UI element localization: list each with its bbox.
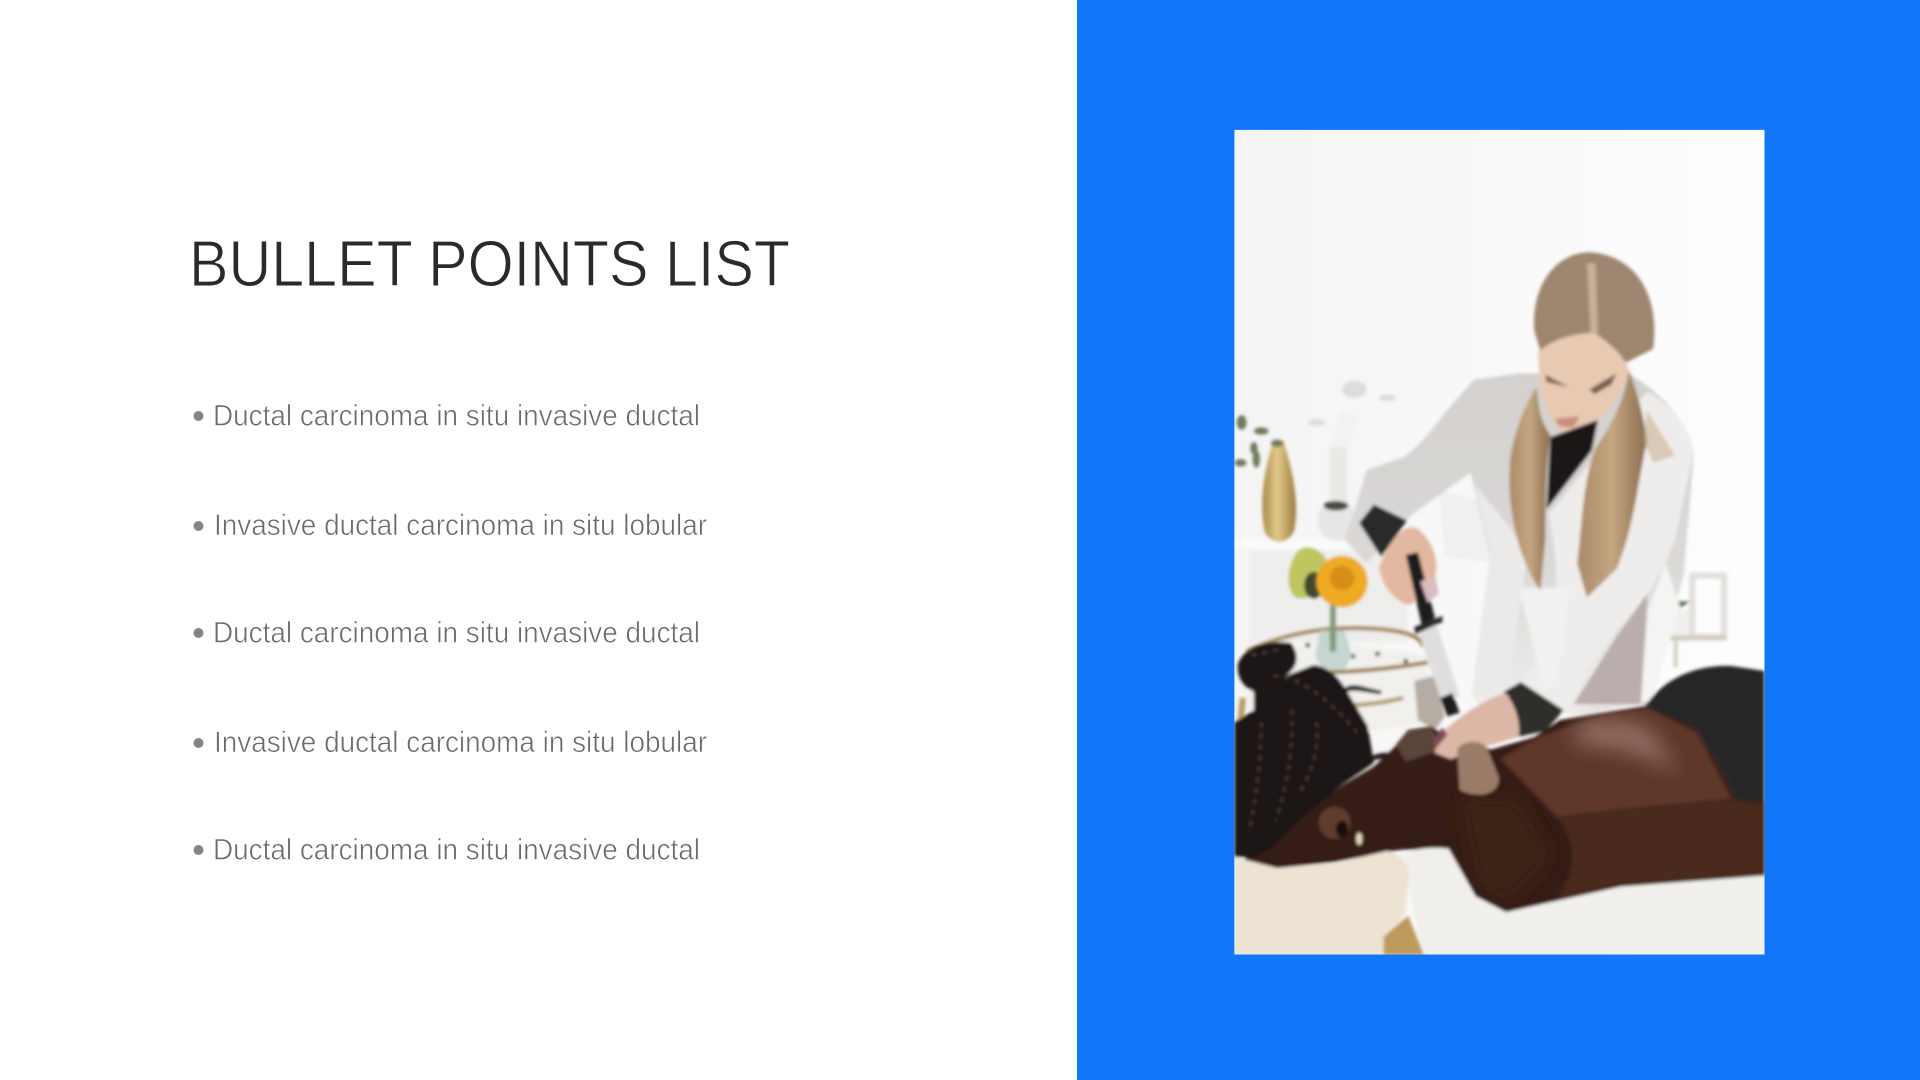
therapist right hand and cuff (1433, 682, 1564, 759)
therapist left hand and cuff (1359, 504, 1436, 605)
photo: therapist performing cupping on a patient (1234, 130, 1764, 955)
bullet item 3: Ductal carcinoma in situ invasive ductal (213, 616, 700, 650)
patient body (1244, 705, 1764, 912)
glass cups on the table (1414, 676, 1445, 730)
wooden table leg (1384, 916, 1424, 955)
therapist coat (1344, 373, 1693, 729)
title: BULLET POINTS LIST (189, 227, 790, 300)
bullet list (194, 400, 707, 866)
bullet item 2: Invasive ductal carcinoma in situ lobular (214, 509, 707, 542)
bullet item 5: Ductal carcinoma in situ invasive ductal (213, 834, 700, 866)
bullet item 4: Invasive ductal carcinoma in situ lobular (214, 726, 707, 759)
blue panel (1077, 0, 1920, 1080)
pillow (1234, 851, 1409, 955)
patient shorts (1646, 666, 1764, 802)
patient face and ear (1274, 798, 1366, 848)
cupping device (1406, 552, 1460, 716)
cupping glass (1457, 742, 1499, 795)
patient braided hair (1234, 642, 1374, 857)
background decor: shelf, vases and plants (1234, 381, 1727, 667)
bullet item 1: Ductal carcinoma in situ invasive ductal (213, 400, 700, 432)
therapist hair and face (1509, 252, 1675, 598)
flowers in a glass vase (1288, 547, 1368, 670)
massage table sheet (1404, 848, 1764, 955)
side table with gold rails (1239, 628, 1433, 735)
